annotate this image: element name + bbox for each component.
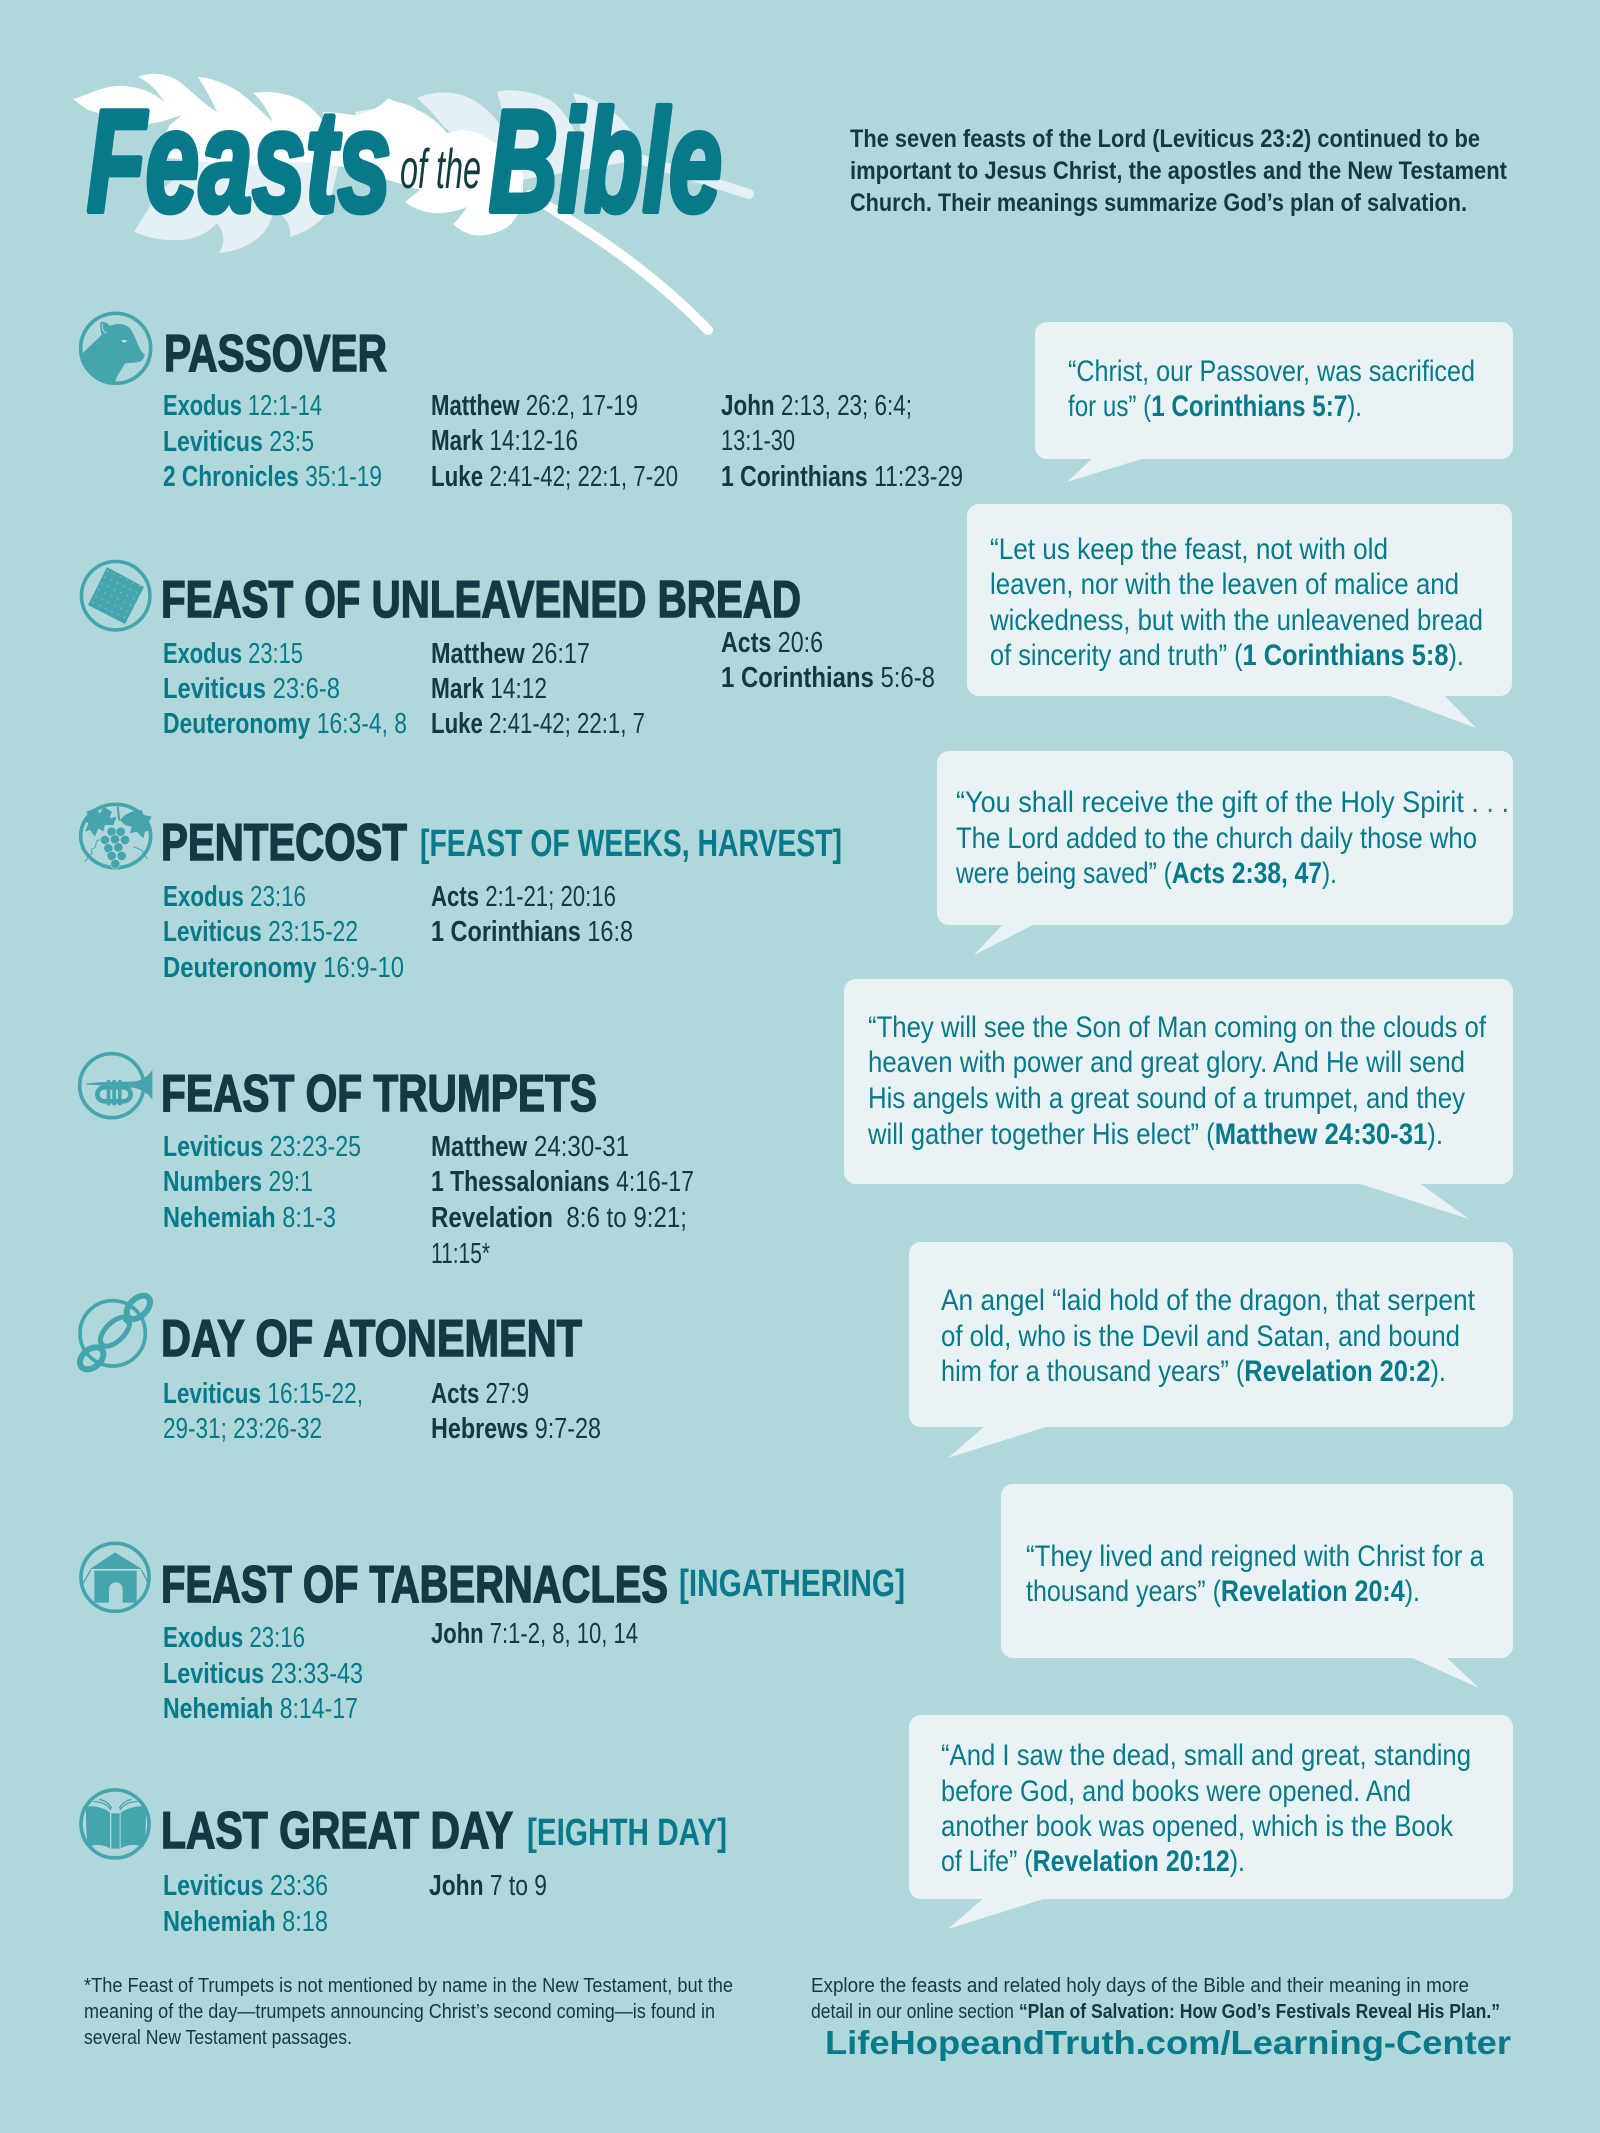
Gospel references: Matthew 26:2, 17-19 xyxy=(431,390,638,422)
icon: tabernacle tent xyxy=(81,1543,149,1611)
callout: Tabernacles quote: thousand years” (Revelation 20:4). xyxy=(1026,1575,1420,1608)
Old Testament references xyxy=(163,390,382,493)
New Testament references: 13:1-30 xyxy=(721,425,795,457)
Old Testament references: Nehemiah 8:1-3 xyxy=(163,1202,336,1234)
footnote: several New Testament passages. xyxy=(84,2026,352,2049)
Old Testament references: 29-31; 23:26-32 xyxy=(163,1413,322,1445)
callout: Trumpets quote: heaven with power and great glory. And He will send xyxy=(868,1046,1465,1079)
icon: grapes xyxy=(81,804,152,869)
Old Testament references xyxy=(163,638,407,740)
footnote: meaning of the day—trumpets announcing Christ’s second coming—is found in xyxy=(84,2000,715,2023)
New Testament references: 1 Corinthians 16:8 xyxy=(431,916,633,948)
New Testament references: 1 Corinthians 11:23-29 xyxy=(721,461,963,493)
callout: Pentecost quote xyxy=(937,751,1513,955)
section: Last Great Day xyxy=(81,1790,727,1938)
callout: Trumpets quote xyxy=(844,979,1513,1219)
title: Feasts xyxy=(87,80,391,242)
callout: Pentecost quote: were being saved” (Acts 2:38, 47). xyxy=(955,857,1337,890)
icon: open book xyxy=(81,1790,149,1858)
title: of the xyxy=(400,137,481,200)
section: Feast of Unleavened Bread xyxy=(82,562,935,740)
section: Day of Atonement xyxy=(76,1291,601,1445)
Old Testament references: Leviticus 23:36 xyxy=(163,1870,328,1902)
New Testament references: Acts 20:6 xyxy=(721,627,823,659)
callout: Unleavened Bread quote xyxy=(967,504,1512,728)
New Testament references: 11:15* xyxy=(431,1238,490,1270)
New Testament references: John 2:13, 23; 6:4; xyxy=(721,390,912,422)
Old Testament references: Exodus 12:1-14 xyxy=(163,390,322,422)
Old Testament references: Leviticus 16:15-22, xyxy=(163,1378,363,1410)
callout: Passover quote: for us” (1 Corinthians 5:7). xyxy=(1068,390,1362,423)
icon: broken chain xyxy=(76,1291,154,1374)
callout: Last Great Day quote xyxy=(909,1715,1513,1929)
New Testament references xyxy=(431,881,633,948)
callout: Atonement quote: him for a thousand years” (Revelation 20:2). xyxy=(941,1355,1446,1388)
callout: Unleavened Bread quote: “Let us keep the feast, not with old xyxy=(990,533,1388,566)
Old Testament references: Exodus 23:16 xyxy=(163,1622,305,1654)
footnote xyxy=(84,1974,733,2049)
Old Testament references: Leviticus 23:23-25 xyxy=(163,1131,361,1163)
Old Testament references: Exodus 23:15 xyxy=(163,638,303,670)
heading: Feast of Tabernacles: FEAST OF TABERNACLES xyxy=(161,1556,668,1614)
callout: Atonement quote xyxy=(909,1242,1513,1458)
subheading: Feast of Weeks, Harvest: [FEAST OF WEEKS, HARVEST] xyxy=(420,823,842,865)
heading: Feast of Unleavened Bread: FEAST OF UNLEAVENED BREAD xyxy=(161,571,801,629)
Old Testament references: Leviticus 23:6-8 xyxy=(163,673,340,705)
footnote: *The Feast of Trumpets is not mentioned by name in the New Testament, but the xyxy=(84,1974,733,1997)
callout: Unleavened Bread quote: wickedness, but with the unleavened bread xyxy=(989,604,1483,637)
footer call to action xyxy=(811,1974,1511,2061)
Old Testament references: Deuteronomy 16:3-4, 8 xyxy=(163,708,407,740)
callout: Last Great Day quote: another book was opened, which is the Book xyxy=(941,1810,1453,1843)
Gospel references: Mark 14:12 xyxy=(431,673,547,705)
heading: Day of Atonement: DAY OF ATONEMENT xyxy=(161,1310,582,1368)
callout: Pentecost quote: “You shall receive the gift of the Holy Spirit . . . xyxy=(956,786,1509,819)
Old Testament references: Leviticus 23:5 xyxy=(163,426,314,458)
section: Passover xyxy=(81,313,963,493)
callout: Passover quote xyxy=(1035,322,1513,482)
Old Testament references: Exodus 23:16 xyxy=(163,881,306,913)
Old Testament references: Leviticus 23:15-22 xyxy=(163,916,358,948)
New Testament references: 1 Corinthians 5:6-8 xyxy=(721,662,935,694)
callout: Unleavened Bread quote: of sincerity and truth” (1 Corinthians 5:8). xyxy=(990,639,1464,672)
Gospel references: Matthew 26:17 xyxy=(431,638,590,670)
New Testament references: Acts 27:9 xyxy=(431,1378,529,1410)
New Testament references: John 7:1-2, 8, 10, 14 xyxy=(431,1618,638,1650)
title: Bible xyxy=(489,80,722,242)
callout: Last Great Day quote: “And I saw the dead, small and great, standing xyxy=(941,1739,1471,1772)
Old Testament references xyxy=(163,1870,328,1938)
Gospel references xyxy=(431,390,678,493)
New Testament references xyxy=(431,1378,601,1445)
icon: lamb xyxy=(81,313,151,383)
callout: Tabernacles quote: “They lived and reigned with Christ for a xyxy=(1026,1540,1485,1573)
website link: LifeHopeandTruth.com/Learning-Center xyxy=(825,2024,1511,2061)
New Testament references xyxy=(431,1131,694,1270)
heading: Pentecost: PENTECOST xyxy=(161,814,407,872)
callout: Last Great Day quote: of Life” (Revelation 20:12). xyxy=(941,1845,1245,1878)
callout: Last Great Day quote: before God, and books were opened. And xyxy=(941,1775,1411,1808)
Old Testament references: Leviticus 23:33-43 xyxy=(163,1658,363,1690)
heading: Passover: PASSOVER xyxy=(164,325,387,383)
intro text: The seven feasts of the Lord (Leviticus 23:2) continued to be xyxy=(850,125,1480,153)
Old Testament references: 2 Chronicles 35:1-19 xyxy=(163,461,382,493)
Gospel references: Mark 14:12-16 xyxy=(431,425,578,457)
New Testament references: Acts 2:1-21; 20:16 xyxy=(431,881,616,913)
New Testament references xyxy=(721,390,963,493)
Old Testament references xyxy=(163,881,404,984)
callout: Passover quote: “Christ, our Passover, was sacrificed xyxy=(1068,355,1475,388)
New Testament references xyxy=(721,627,935,694)
Gospel references: Luke 2:41-42; 22:1, 7 xyxy=(431,708,645,740)
callout: Atonement quote: of old, who is the Devil and Satan, and bound xyxy=(941,1320,1460,1353)
New Testament references: Hebrews 9:7-28 xyxy=(431,1413,601,1445)
callout: Trumpets quote: will gather together His elect” (Matthew 24:30-31). xyxy=(867,1118,1443,1151)
intro text: important to Jesus Christ, the apostles and the New Testament xyxy=(850,157,1508,185)
footer call to action: detail in our online section “Plan of Salvation: How God’s Festivals Reveal His Plan.” xyxy=(811,2000,1500,2023)
callout: Atonement quote: An angel “laid hold of the dragon, that serpent xyxy=(941,1284,1475,1317)
intro text xyxy=(850,125,1508,217)
icon: trumpet xyxy=(80,1054,152,1118)
illustration: palm branch behind title xyxy=(73,74,749,330)
heading: Last Great Day: LAST GREAT DAY xyxy=(161,1802,513,1860)
Old Testament references: Nehemiah 8:18 xyxy=(163,1906,328,1938)
New Testament references: John 7 to 9 xyxy=(429,1870,547,1902)
heading: Feast of Trumpets: FEAST OF TRUMPETS xyxy=(161,1065,597,1123)
subheading: Ingathering: [INGATHERING] xyxy=(679,1563,905,1605)
callout: Tabernacles quote xyxy=(1001,1484,1513,1688)
section: Pentecost xyxy=(81,804,842,984)
Old Testament references: Numbers 29:1 xyxy=(163,1166,313,1198)
New Testament references: 1 Thessalonians 4:16-17 xyxy=(431,1166,694,1198)
callout: Pentecost quote: The Lord added to the church daily those who xyxy=(956,822,1477,855)
section: Feast of Trumpets xyxy=(80,1054,694,1270)
Old Testament references xyxy=(163,1622,363,1725)
Old Testament references xyxy=(163,1131,361,1234)
New Testament references: Revelation 8:6 to 9:21; xyxy=(431,1202,687,1234)
subheading: Eighth Day: [EIGHTH DAY] xyxy=(527,1812,727,1854)
callout: Trumpets quote: His angels with a great sound of a trumpet, and they xyxy=(868,1082,1465,1115)
section: Feast of Tabernacles xyxy=(81,1543,905,1725)
callout: Trumpets quote: “They will see the Son of Man coming on the clouds of xyxy=(868,1011,1487,1044)
Old Testament references xyxy=(163,1378,363,1445)
icon: unleavened bread xyxy=(82,562,150,630)
Gospel references: Luke 2:41-42; 22:1, 7-20 xyxy=(431,461,678,493)
intro text: Church. Their meanings summarize God’s plan of salvation. xyxy=(850,189,1467,217)
Old Testament references: Nehemiah 8:14-17 xyxy=(163,1693,358,1725)
footer call to action: Explore the feasts and related holy days of the Bible and their meaning in more xyxy=(811,1974,1469,1997)
New Testament references: Matthew 24:30-31 xyxy=(431,1131,629,1163)
Old Testament references: Deuteronomy 16:9-10 xyxy=(163,952,404,984)
callout: Unleavened Bread quote: leaven, nor with the leaven of malice and xyxy=(990,568,1459,601)
Gospel references xyxy=(431,638,645,740)
